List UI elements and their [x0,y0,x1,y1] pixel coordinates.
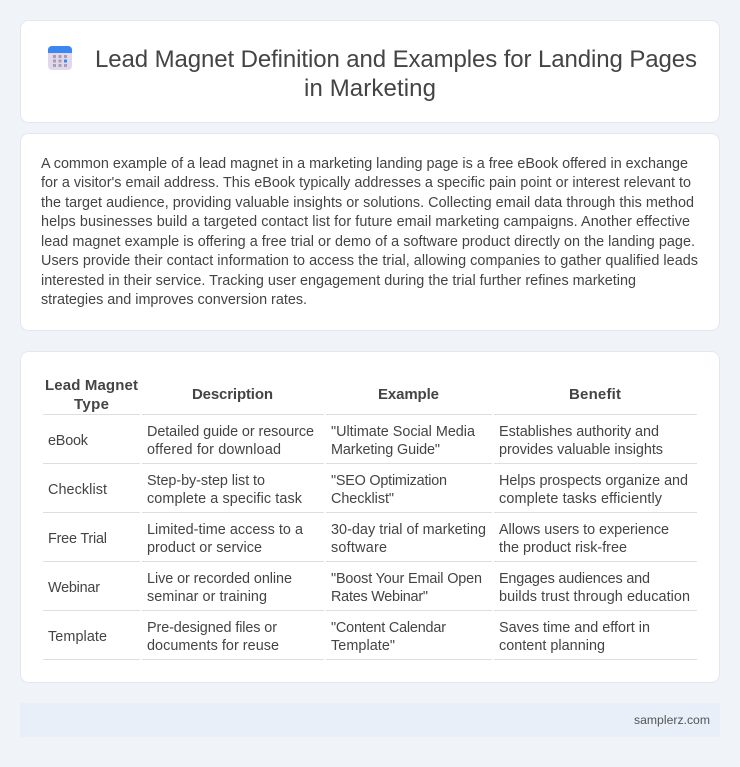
table row: Checklist: complete tasks efficiently [499,491,663,507]
table row: Webinar: builds trust through education [499,589,690,605]
table row: Template: "Content Calendar [331,620,446,636]
text block: paragraph: helps businesses build a targeted contact list for future email marketing campaigns. Another effective [41,214,690,230]
title: in Marketing [304,75,436,102]
table row: Checklist: Checklist" [331,491,394,507]
table row: Template: content planning [499,638,605,654]
table row: Webinar: seminar or training [147,589,267,605]
footer: samplerz.com [634,713,710,727]
table row: Template: Template [48,629,107,645]
panel: comparison table [20,352,720,682]
table header row: Lead Magnet [45,377,138,394]
footer [20,703,720,737]
table row: Free Trial: Limited-time access to a [147,522,303,538]
table row: Free Trial: Free Trial [48,531,107,547]
table row: eBook: eBook [48,433,89,449]
table row: Free Trial: Allows users to experience [499,522,669,538]
table row: Free Trial: product or service [147,540,262,556]
title [95,46,697,102]
text block: paragraph: A common example of a lead magnet in a marketing landing page is a free eBook offered in exchange [41,156,688,172]
table row: Free Trial [48,522,669,556]
table row: Checklist: Helps prospects organize and [499,473,688,489]
table row: eBook: Establishes authority and [499,424,659,440]
table row: eBook: Marketing Guide" [331,442,440,458]
panel: intro paragraph [20,134,720,330]
table row: Checklist: complete a specific task [147,491,303,507]
table header row [45,377,621,413]
title: Lead Magnet Definition and Examples for Landing Pages [95,46,697,73]
table header row: Type [74,396,109,413]
text block: paragraph: interested in their service. Tracking user engagement during the trial further refines marketing [41,273,636,289]
table row: Webinar [48,571,690,605]
table row: Checklist: "SEO Optimization [331,473,447,489]
table row: Checklist: Step-by-step list to [147,473,265,489]
table row: Free Trial: 30-day trial of marketing [331,522,486,538]
table row: eBook: Detailed guide or resource [147,424,314,440]
panel: title header [20,20,720,122]
table row: Free Trial: the product risk-free [499,540,627,556]
table row: Template: Pre-designed files or [147,620,277,636]
text block: paragraph: strategies and improves conversion rates. [41,292,307,308]
table row: Webinar: "Boost Your Email Open [331,571,482,587]
table row: Checklist [48,473,688,507]
table row: Template: Saves time and effort in [499,620,650,636]
table header row: Benefit [569,386,621,403]
text block: paragraph: Users provide their contact information to access the trial, allowing companies to gather qualified leads [41,253,698,269]
text block: paragraph: for a visitor's email address. This eBook typically addresses a specific pain point or interest relevant to [41,175,691,191]
table row: Webinar: Engages audiences and [499,571,650,587]
text block: paragraph [41,156,698,308]
table row: eBook [48,424,663,458]
table header row: Description [192,386,273,403]
text block: paragraph: lead magnet example is offering a free trial or demo of a software product directly on the landing page. [41,234,695,250]
table row: Webinar: Live or recorded online [147,571,292,587]
icon: calendar [48,46,72,70]
table row: Template: documents for reuse [147,638,279,654]
table row: Webinar: Webinar [48,580,100,596]
table row: eBook: offered for download [147,442,281,458]
text block: paragraph: the target audience, providing valuable insights or solutions. Collecting email data through this method [41,195,694,211]
table row: Checklist: Checklist [48,482,107,498]
table row: Free Trial: software [331,540,387,556]
table row: Template [48,620,650,654]
table row: eBook: "Ultimate Social Media [331,424,475,440]
table row: eBook: provides valuable insights [499,442,663,458]
table row: Template: Template" [331,638,395,654]
table row: Webinar: Rates Webinar" [331,589,428,605]
table header row: Example [378,386,439,403]
